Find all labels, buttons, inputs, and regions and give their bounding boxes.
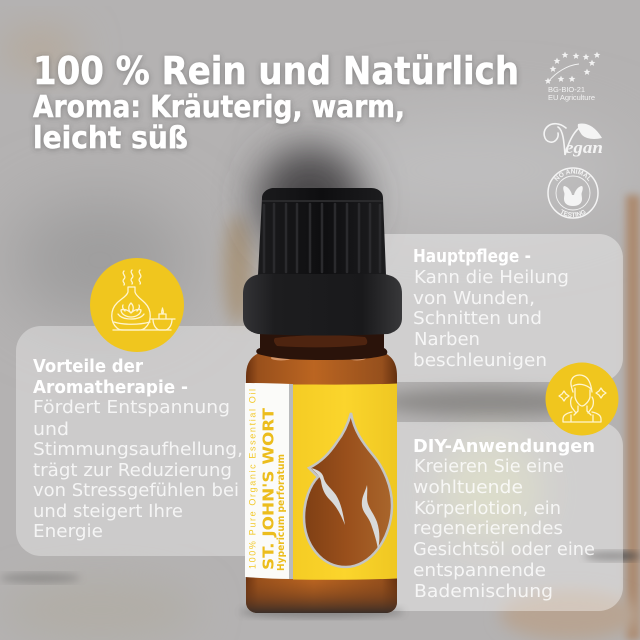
subheading — [33, 90, 405, 156]
shoulder highlights — [271, 356, 366, 360]
label drop — [304, 413, 392, 567]
glass body — [246, 352, 397, 613]
panel text: skin care: Kann die Heilung — [414, 268, 569, 288]
label white strip — [245, 383, 291, 579]
panel text: aromatherapy: trägt zur Reduzierung — [33, 461, 232, 481]
panel text: aromatherapy: und — [33, 420, 69, 440]
panel: skin care — [360, 234, 623, 382]
dropper cap — [258, 188, 386, 275]
badge: vegan: egan — [565, 138, 603, 157]
panel text: skin care: beschleunigen — [413, 351, 547, 371]
panel heading: skin care: Hauptpflege - — [413, 247, 531, 267]
label product name: ST. JOHN'S WORT — [260, 407, 278, 570]
label grey divider — [289, 384, 293, 579]
panel heading: aromatherapy: Aromatherapie - — [33, 378, 188, 398]
panel heading: DIY: DIY-Anwendungen — [413, 437, 595, 457]
panel text: DIY: entspannende — [413, 561, 546, 581]
icon: woman with towel — [546, 362, 618, 436]
badge: no animal testing: TESTING — [561, 209, 586, 217]
panel text: aromatherapy: Energie — [33, 522, 103, 542]
main heading: 100 % Rein und Natürlich — [33, 49, 519, 93]
neck glass reflection — [274, 335, 367, 347]
panel text: aromatherapy: Fördert Entspannung — [33, 398, 230, 418]
panel text: DIY: Kreieren Sie eine — [414, 457, 564, 477]
icon: aroma diffuser — [90, 258, 184, 352]
panel text: aromatherapy: und steigert Ihre — [33, 502, 183, 522]
tamper ring — [243, 274, 402, 336]
label small text: 100% Pure Organic Essential Oil — [248, 389, 258, 569]
panel: aromatherapy benefits — [16, 326, 316, 556]
panel text: skin care: Narben — [414, 330, 480, 350]
panel text: DIY: regenerierendes — [413, 519, 563, 539]
badge: EU organic: BG-BIO-21 — [548, 85, 585, 94]
panel text: DIY — [413, 457, 595, 602]
glass base — [246, 578, 397, 613]
neck — [256, 332, 387, 360]
label latin name: Hypericum perforatum — [276, 454, 287, 571]
panel heading: aromatherapy — [33, 357, 188, 398]
subheading: Aroma: Kräuterig, warm, — [33, 90, 405, 125]
panel text: skin care: von Wunden, — [413, 289, 535, 309]
panel text: aromatherapy — [33, 398, 243, 542]
panel heading: aromatherapy: Vorteile der — [33, 357, 143, 377]
panel text: DIY: Gesichtsöl oder eine — [413, 540, 595, 560]
bottle shadow — [240, 606, 404, 618]
panel text: DIY: Bademischung — [414, 582, 553, 602]
badge: EU organic: EU Agriculture — [548, 93, 595, 102]
panel text: skin care — [413, 268, 569, 371]
badge: no animal testing — [547, 167, 599, 219]
badge: EU organic — [545, 52, 600, 102]
panel text: DIY: Körperlotion, ein — [414, 499, 561, 519]
badge: vegan — [544, 124, 603, 157]
panel text: skin care: Schnitten und — [413, 309, 542, 329]
bottle — [240, 188, 404, 618]
panel: DIY uses — [360, 422, 623, 611]
label yellow area — [293, 384, 397, 580]
badge: no animal testing: NO ANIMAL — [554, 169, 590, 182]
panel text: aromatherapy: Stimmungsaufhellung, — [33, 440, 243, 460]
panel text: DIY: wohltuende — [413, 478, 523, 498]
subheading: leicht süß — [33, 121, 188, 156]
panel text: aromatherapy: von Stressgefühlen bei — [33, 481, 239, 501]
label — [245, 383, 397, 580]
title — [33, 49, 519, 156]
